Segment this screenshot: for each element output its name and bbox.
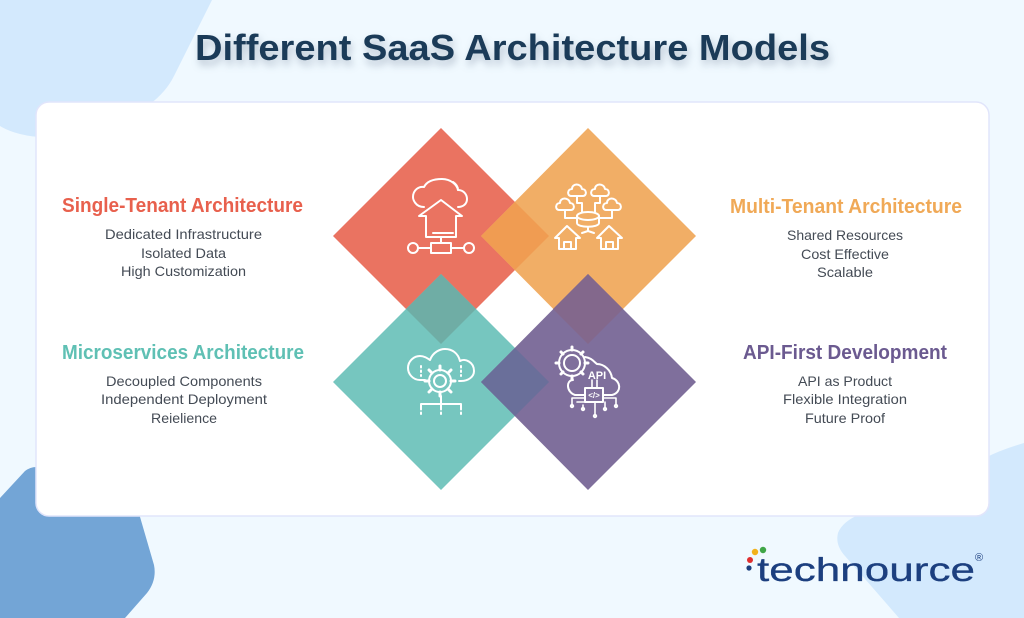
diamond: single-tenant [333,128,549,344]
logo: technource [746,547,983,588]
icon: cloud gear microservices [408,349,474,416]
text block: single-tenant: High Customization [121,263,246,279]
logo: technource: ® [975,552,983,564]
text block: multi-tenant: Multi-Tenant Architecture [730,196,962,218]
overlap: teal and purple [481,348,549,416]
icon: cloud house network [408,179,474,253]
text block: microservices: Reielience [151,410,217,426]
diamond: multi-tenant [481,128,696,344]
overlap: red and teal [406,274,476,344]
icon label: API: API [588,370,606,382]
text block: API-first: API-First Development [743,342,947,364]
text block: microservices: Independent Deployment [101,391,267,407]
text block: multi-tenant: Shared Resources [787,227,903,243]
panel: main card [36,102,989,516]
text block: microservices: Microservices Architecture [62,342,304,364]
text block: multi-tenant: Cost Effective [801,246,889,262]
text block: single-tenant: Single-Tenant Architecture [62,195,303,217]
diamond: microservices [333,274,549,490]
logo: technource: technource [757,551,975,588]
icon: API cloud chip [556,347,619,417]
icon: shared cloud tenants [555,184,622,249]
text block: single-tenant [62,195,303,279]
text block: microservices [62,342,304,426]
diamond: API-first [481,274,696,490]
background blob: bottom left [0,467,155,618]
text block: API-first: Flexible Integration [783,391,907,407]
icon label: code: </> [588,391,600,400]
background blob: bottom right [837,443,1024,618]
text block: single-tenant: Dedicated Infrastructure [105,226,262,242]
title: Different SaaS Architecture Models [195,27,830,68]
overlap: orange and purple [553,274,623,344]
text block: multi-tenant [730,196,962,280]
text block: API-first: API as Product [798,373,892,389]
overlap: red and orange [481,202,549,270]
text block: multi-tenant: Scalable [817,264,873,280]
text block: microservices: Decoupled Components [106,373,262,389]
text block: single-tenant: Isolated Data [141,245,226,261]
background blob: top left [0,0,212,137]
text block: API-first [743,342,947,426]
text block: API-first: Future Proof [805,410,885,426]
